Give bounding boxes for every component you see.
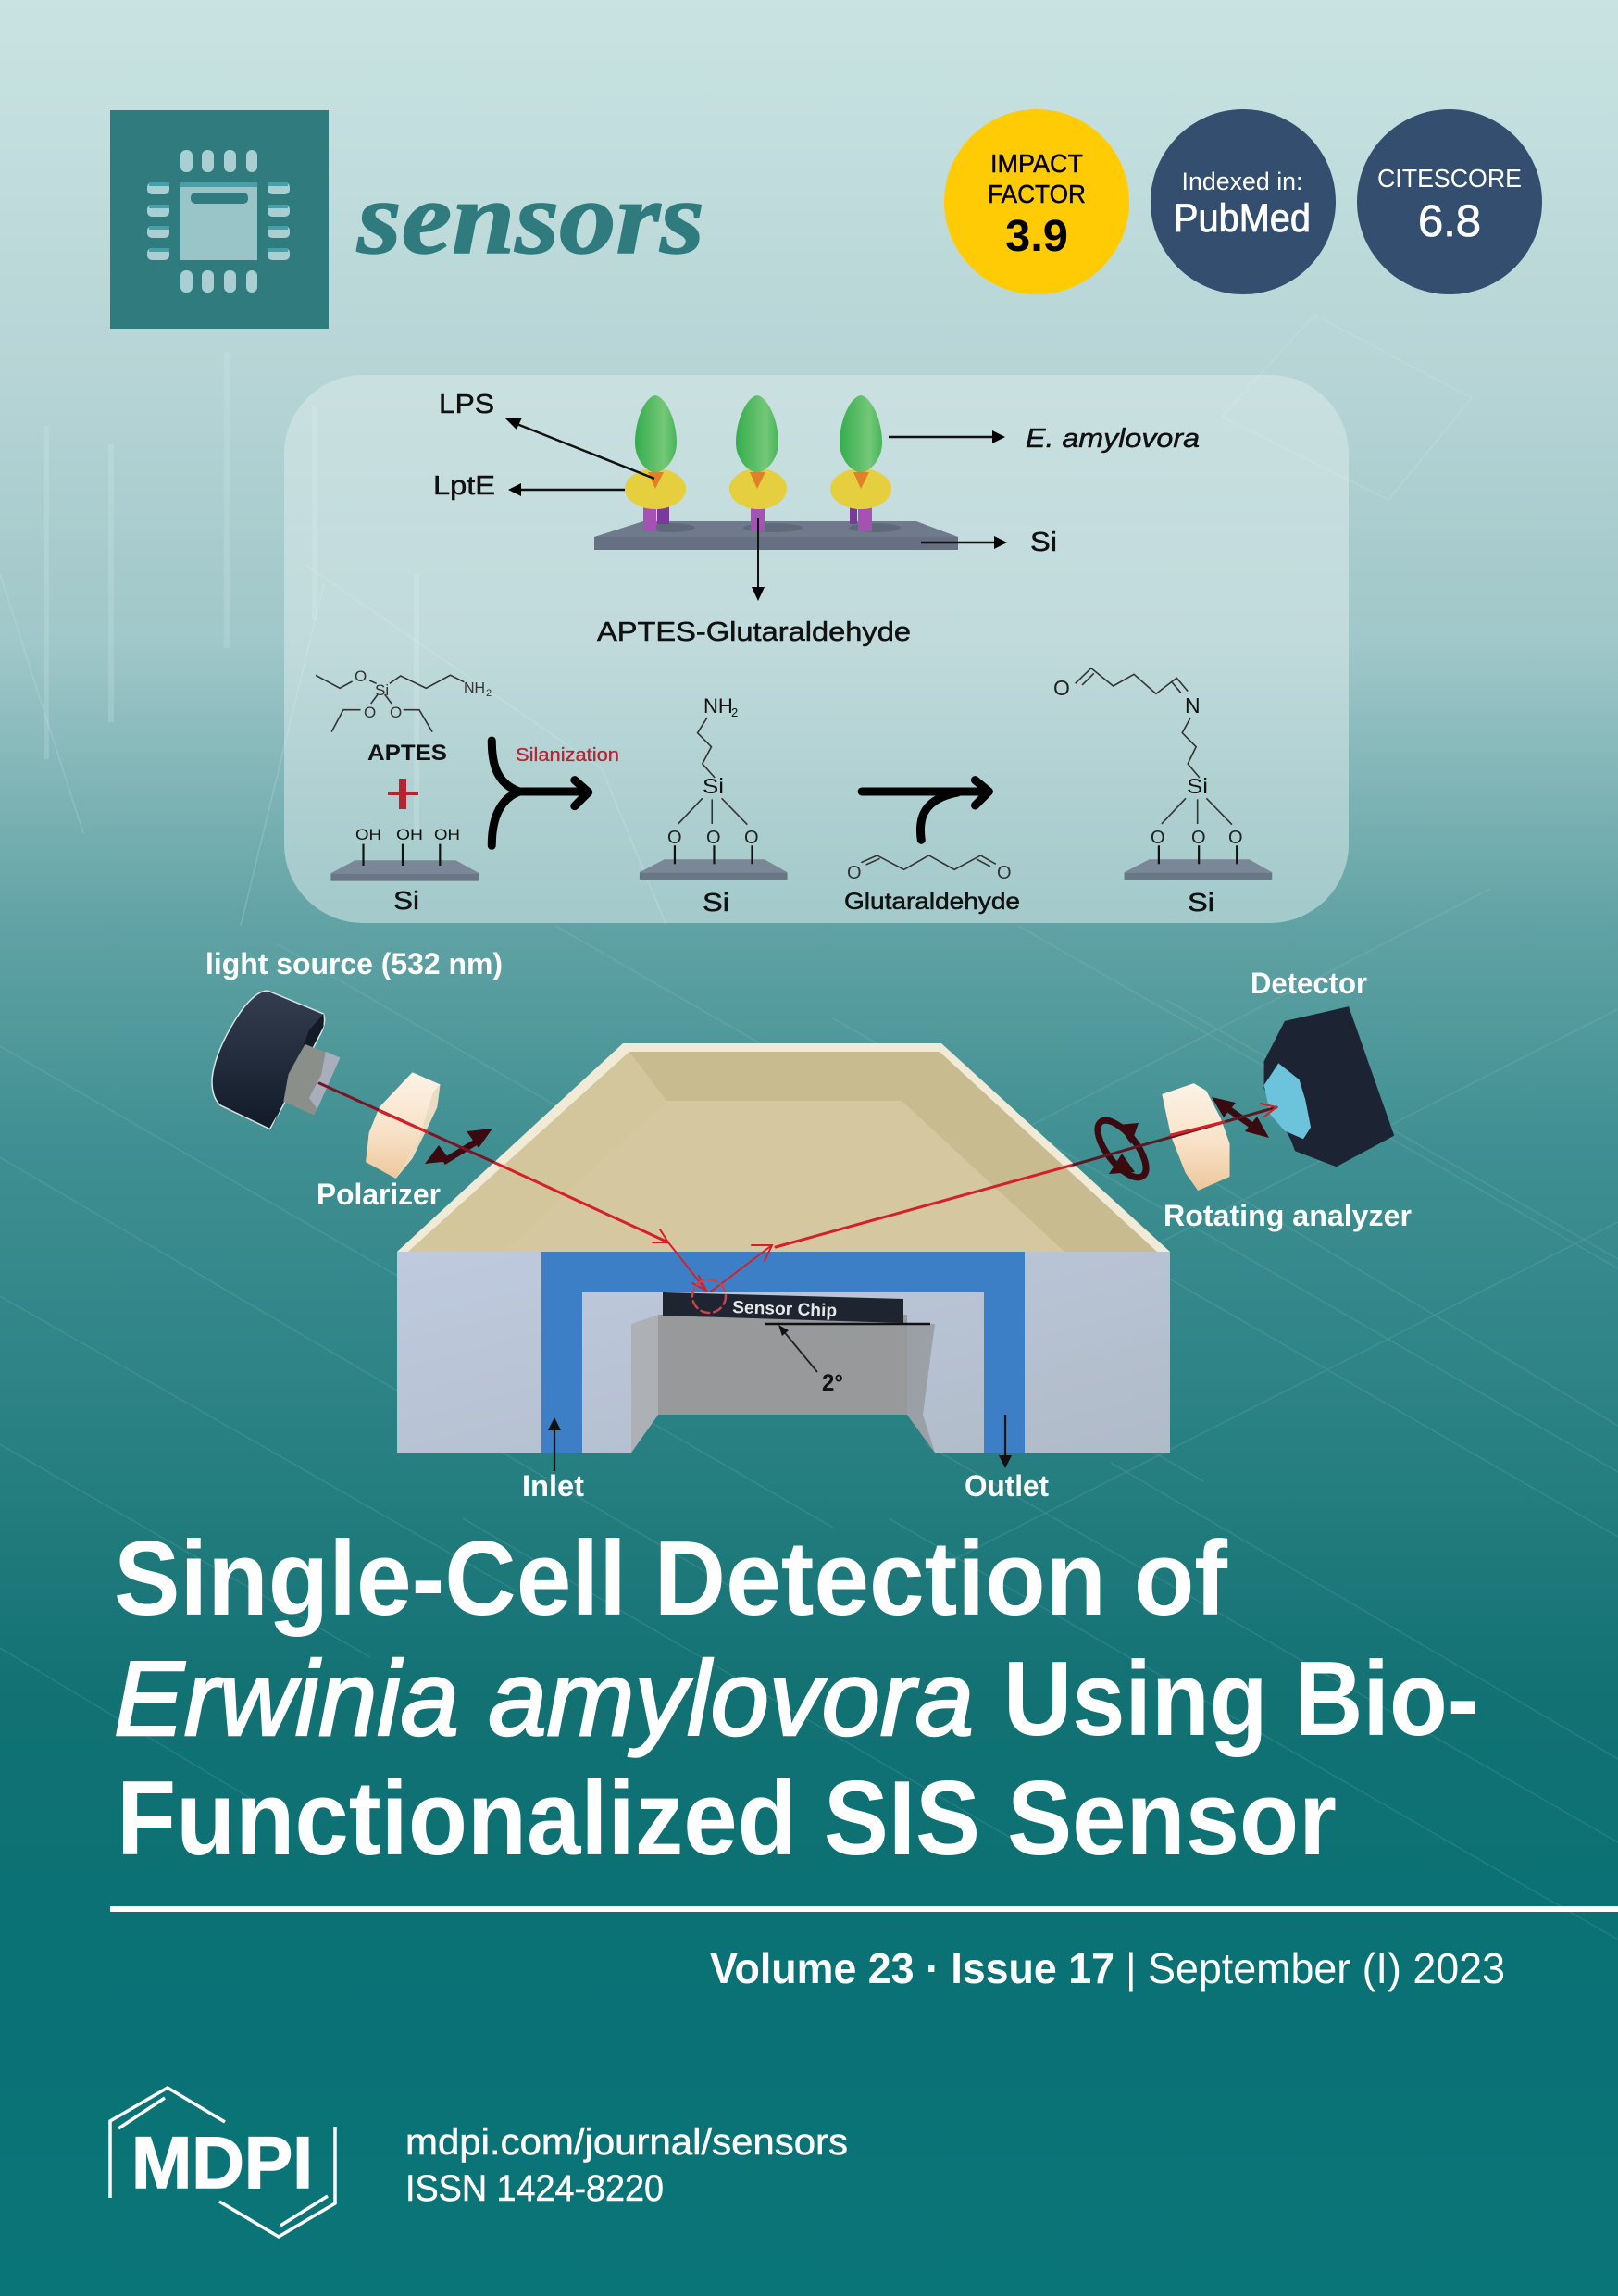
APTES molecule atoms: Si	[375, 681, 389, 699]
label: LptE: LptE	[433, 471, 495, 501]
silicon plate left: OH	[434, 826, 460, 843]
chamber recess	[631, 1315, 935, 1453]
label: detector: Detector	[1251, 967, 1367, 1000]
APTES molecule atoms: NH	[464, 680, 485, 696]
label: outlet: Outlet	[965, 1469, 1049, 1503]
label: APTES: APTES	[367, 741, 447, 766]
label: E. amylovora: E. amylovora	[1026, 424, 1200, 454]
arrow: silanization	[492, 741, 589, 845]
badge: impact factor: IMPACT	[990, 149, 1083, 178]
badge: PubMed: PubMed	[1174, 196, 1311, 241]
polarization arrow	[425, 1129, 492, 1164]
silanized surface: Si	[703, 888, 729, 917]
journal website and ISSN: mdpi.com/journal/sensors	[405, 2122, 848, 2163]
label: LPS: LPS	[439, 390, 494, 419]
light path	[319, 1083, 1276, 1313]
functionalized surface: O	[1191, 828, 1206, 848]
title rule	[110, 1906, 1618, 1912]
diagram: silanization chemistry	[316, 668, 1272, 917]
silicon plate left	[330, 826, 479, 915]
silanized surface: 2	[731, 705, 738, 719]
badge: CiteScore: CITESCORE	[1377, 164, 1522, 193]
badge: PubMed: Indexed in:	[1181, 168, 1303, 195]
silicon plate	[594, 521, 958, 550]
badge: CiteScore	[1357, 109, 1542, 294]
plus sign	[388, 779, 418, 809]
label: polarizer: Polarizer	[317, 1178, 441, 1211]
flow channel	[541, 1252, 1025, 1453]
functionalized surface: O	[1053, 676, 1070, 700]
polarizer	[366, 1072, 440, 1179]
arrow: Si	[921, 536, 1007, 549]
journal website and ISSN	[405, 2122, 848, 2209]
arrow: inlet	[548, 1417, 561, 1471]
silicon plate left: OH	[396, 826, 423, 843]
glutaraldehyde molecule	[847, 855, 1012, 883]
functionalized surface: N	[1185, 693, 1201, 718]
label: glutaraldehyde: Glutaraldehyde	[844, 889, 1020, 915]
arrow: LptE	[508, 483, 625, 496]
APTES molecule bonds	[316, 675, 464, 732]
silanized surface: Si	[703, 774, 724, 798]
bacterium stack 2	[729, 395, 787, 531]
silanized surface: O	[667, 828, 682, 848]
silanized surface: O	[706, 828, 721, 848]
label: Si: Si	[1030, 528, 1057, 557]
issue line: Volume 23 · Issue 17	[710, 1944, 1114, 1992]
APTES molecule atoms: 2	[486, 688, 492, 699]
article title: Erwinia amylovora	[114, 1641, 974, 1758]
APTES molecule atoms	[355, 668, 492, 721]
chamber body	[397, 1252, 1170, 1453]
MDPI logo	[110, 2088, 335, 2237]
label: rotating analyzer: Rotating analyzer	[1164, 1199, 1412, 1232]
article title	[114, 1520, 1479, 1878]
bacterium stack 3	[830, 395, 891, 531]
panel: bio-functionalized surface	[284, 375, 1349, 923]
silicon plate left: Si	[393, 886, 419, 915]
badge: CiteScore: 6.8	[1418, 197, 1481, 246]
functionalized surface: Si	[1187, 774, 1208, 798]
label: inlet: Inlet	[522, 1469, 584, 1503]
APTES molecule atoms: O	[390, 704, 402, 721]
diagram: SPR chamber	[205, 947, 1412, 1503]
badge: impact factor	[944, 109, 1129, 294]
journal name: sensors	[356, 161, 704, 276]
analyzer polarization arrow	[1212, 1097, 1269, 1138]
sensor chip: Sensor Chip	[732, 1298, 837, 1321]
journal logo	[110, 110, 329, 329]
label: light source: light source (532 nm)	[205, 947, 503, 980]
article title: Functionalized SIS Sensor	[117, 1760, 1337, 1878]
arrow: E. amylovora	[889, 430, 1005, 443]
detector	[1264, 1006, 1394, 1167]
badge: PubMed	[1151, 109, 1336, 294]
badge: impact factor: 3.9	[1005, 212, 1068, 261]
article title: Using Bio-	[1003, 1641, 1479, 1758]
light source	[212, 991, 340, 1129]
APTES molecule atoms: O	[364, 704, 376, 721]
MDPI logo: MDPI	[131, 2121, 313, 2203]
glutaraldehyde molecule: O	[997, 863, 1012, 883]
arrow: glutaraldehyde step	[862, 780, 989, 840]
functionalized surface: O	[1151, 828, 1165, 848]
functionalized surface: O	[1228, 828, 1243, 848]
bacterium stack 1	[625, 395, 686, 531]
sensor chip	[663, 1292, 930, 1324]
chamber top	[397, 1043, 1170, 1252]
analyzer rotation arrow	[1089, 1113, 1154, 1185]
label: silanization: Silanization	[516, 745, 619, 766]
journal website and ISSN: ISSN 1424-8220	[405, 2168, 664, 2209]
arrow: outlet	[999, 1415, 1012, 1468]
article title: Single-Cell Detection of	[114, 1520, 1228, 1638]
glutaraldehyde molecule: O	[847, 863, 862, 883]
arrow: LPS	[505, 418, 654, 479]
angle leader: 2°	[822, 1370, 843, 1396]
silicon plate left: OH	[355, 826, 381, 843]
rotating analyzer	[1162, 1083, 1230, 1191]
functionalized surface: Si	[1188, 888, 1214, 917]
diagram: E. amylovora on silicon	[433, 390, 1200, 647]
label: APTES-Glutaraldehyde: APTES-Glutaraldehyde	[597, 618, 911, 647]
silanized surface: NH	[703, 694, 733, 718]
functionalized surface	[1053, 668, 1272, 917]
issue line	[710, 1944, 1505, 1992]
issue line: | September (I) 2023	[1126, 1944, 1505, 1992]
badge: impact factor: FACTOR	[988, 180, 1086, 208]
arrow: APTES-Glutaraldehyde	[752, 518, 765, 601]
silanized surface	[640, 694, 788, 917]
angle leader	[778, 1325, 843, 1396]
APTES molecule atoms: O	[355, 668, 367, 685]
silanized surface: O	[744, 828, 759, 848]
